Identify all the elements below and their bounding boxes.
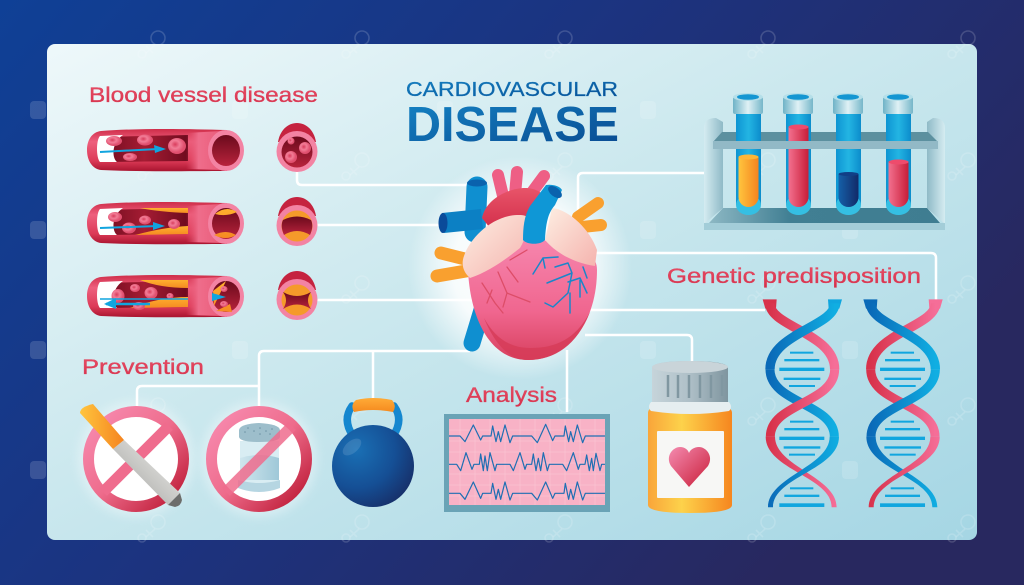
test tubes rack — [704, 93, 945, 230]
coronary vessels — [482, 250, 587, 313]
tube: orange — [733, 93, 763, 215]
dna helix left — [763, 299, 842, 507]
kettlebell icon — [332, 398, 414, 507]
tube: red low — [883, 93, 913, 215]
cross-section: blocked — [276, 271, 318, 320]
salt shaker — [238, 423, 280, 492]
heading: analysis: Analysis — [466, 384, 557, 407]
blue aorta — [523, 185, 562, 244]
ventricle — [468, 240, 597, 360]
cigarette — [80, 404, 182, 507]
heart label — [669, 447, 710, 487]
heart — [437, 172, 601, 360]
dna helix right — [863, 299, 943, 507]
tube: red — [783, 93, 813, 215]
connector lines — [137, 172, 936, 412]
cross-section: narrowed — [276, 197, 318, 246]
ecg monitor — [444, 414, 610, 512]
heart vessels behind — [437, 172, 601, 343]
title: DISEASE — [406, 98, 619, 152]
cross-section: healthy — [276, 123, 318, 172]
vessel: healthy — [87, 129, 244, 171]
rack front bar — [713, 141, 938, 149]
vessel: narrowed — [87, 202, 244, 244]
heading: blood vessel disease: Blood vessel disease — [89, 84, 318, 107]
tube: navy — [833, 93, 863, 215]
rack top — [713, 132, 938, 142]
heading: genetic predisposition: Genetic predisposition — [667, 265, 921, 288]
no salt icon — [201, 401, 317, 517]
medicine bottle — [648, 361, 732, 513]
vessel: blocked — [87, 275, 244, 317]
heart glow — [408, 156, 632, 380]
left atrium — [463, 215, 528, 278]
right atrium — [545, 208, 597, 266]
heading: prevention: Prevention — [82, 356, 204, 379]
main panel — [47, 44, 977, 540]
no smoking icon — [78, 401, 194, 517]
title: CARDIOVASCULAR — [406, 78, 618, 101]
aortic dome — [482, 188, 548, 228]
rack posts and base — [704, 118, 723, 224]
